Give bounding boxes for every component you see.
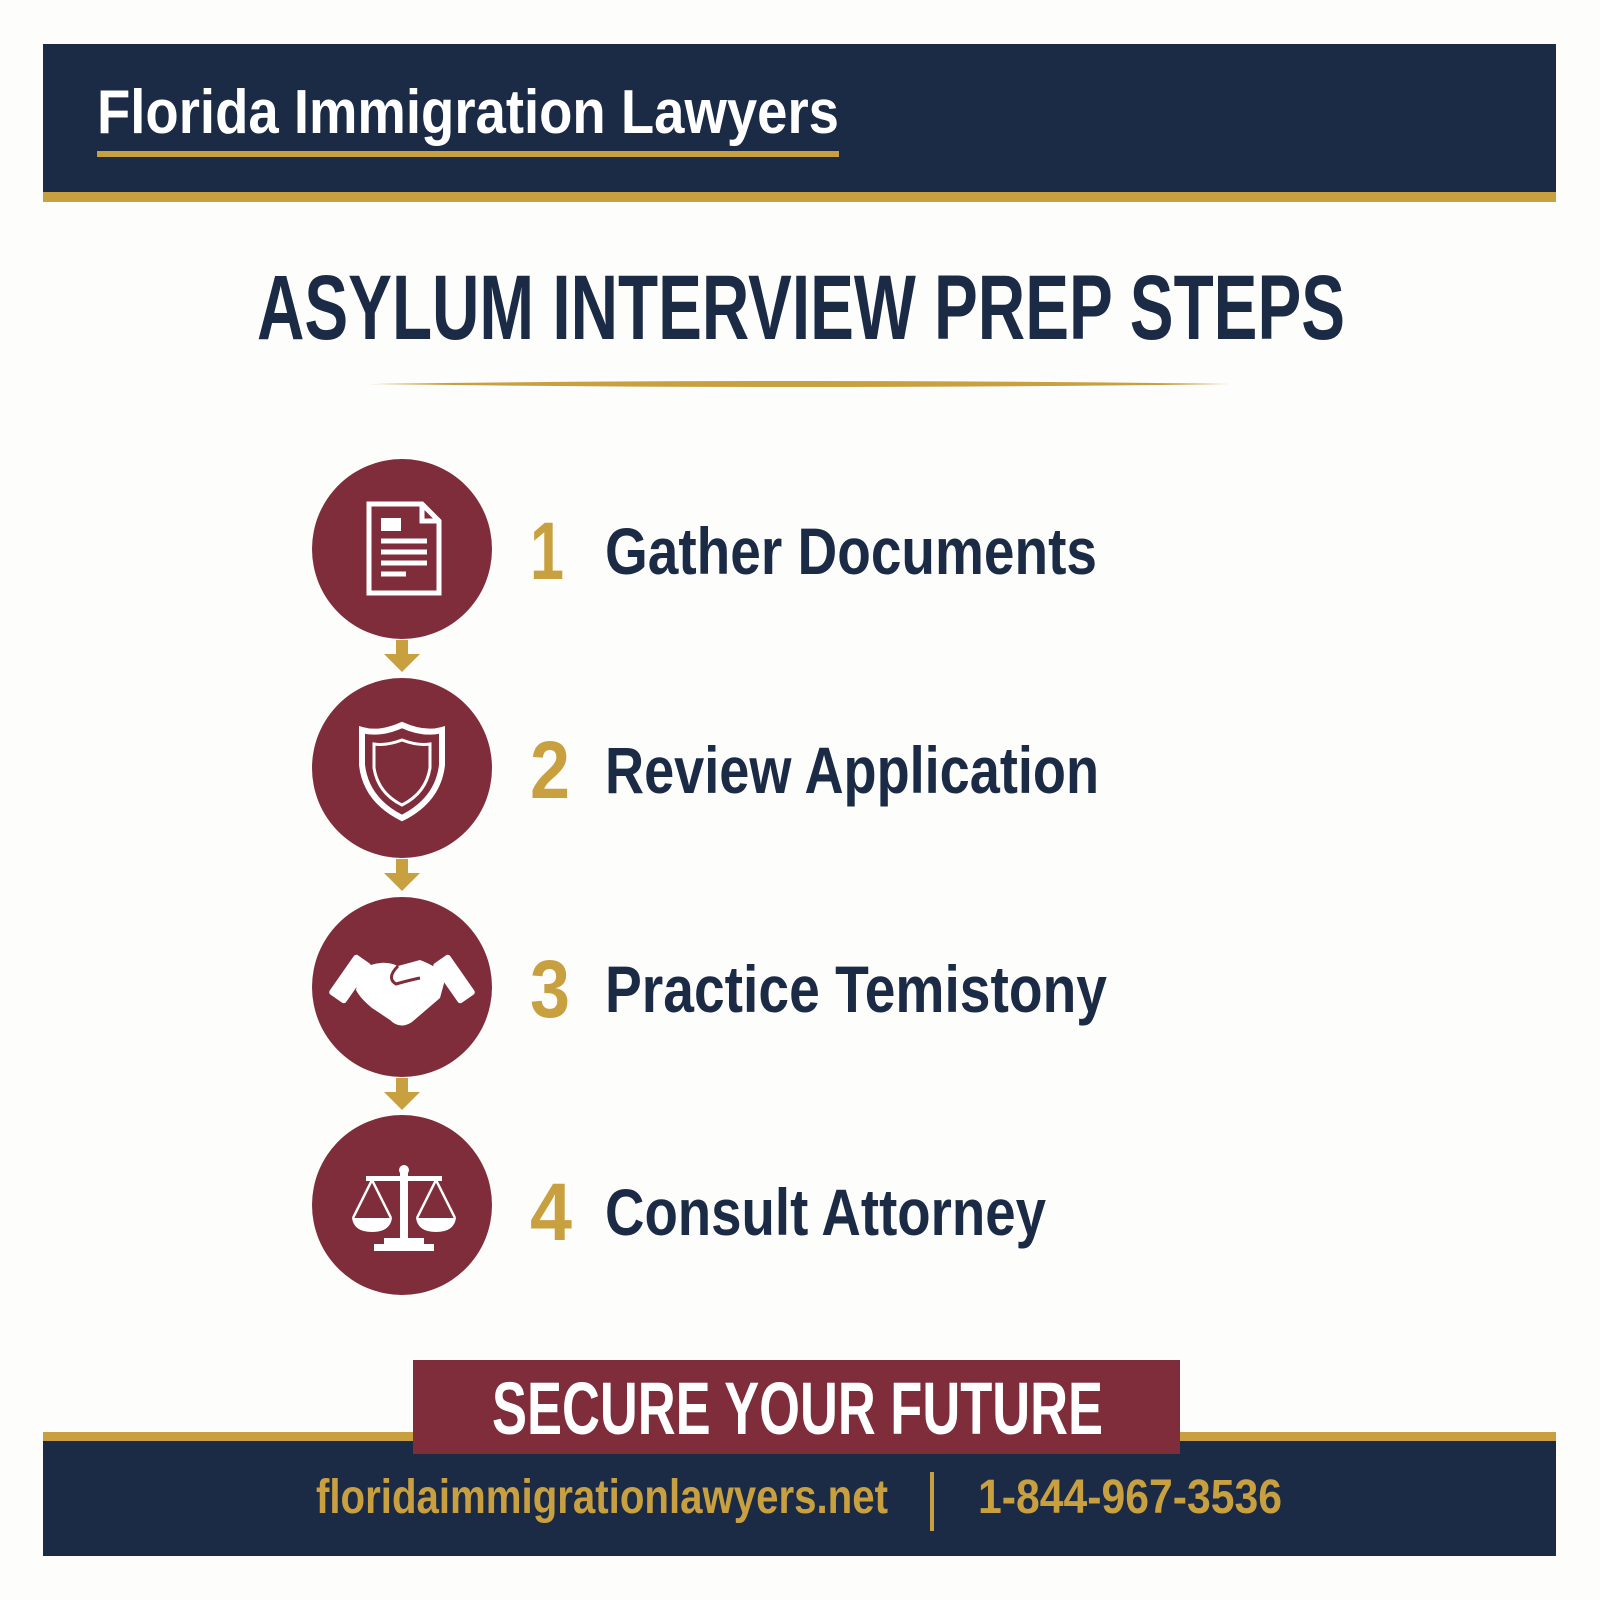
- step 1: Gather Documents: [605, 514, 1097, 588]
- title underline: [369, 381, 1229, 387]
- step 4: [312, 1115, 1046, 1295]
- step 2: Review Application: [605, 733, 1099, 807]
- icon: document: [369, 504, 439, 593]
- step 1: [312, 459, 1097, 639]
- step 3: 3: [530, 944, 570, 1035]
- arrow 2: [384, 859, 420, 891]
- banner: secure your future: SECURE YOUR FUTURE: [492, 1367, 1103, 1450]
- icon: handshake: [328, 954, 476, 1026]
- icon: scales: [352, 1165, 456, 1251]
- banner: secure your future: [413, 1360, 1180, 1454]
- arrow 3: [384, 1078, 420, 1110]
- arrow 1: [384, 640, 420, 672]
- step 1: 1: [530, 506, 564, 597]
- footer url: floridaimmigrationlawyers.net: [316, 1471, 888, 1524]
- step 2: 2: [530, 725, 570, 816]
- footer phone: 1-844-967-3536: [978, 1471, 1282, 1524]
- step 2: [312, 678, 1099, 858]
- step 4: Consult Attorney: [605, 1175, 1046, 1249]
- footer bar: [43, 1432, 1556, 1556]
- steps: [312, 459, 1107, 1295]
- step 3: [312, 897, 1107, 1077]
- icon: shield: [362, 725, 442, 818]
- step 3: Practice Temistony: [605, 952, 1107, 1026]
- header bar: [43, 44, 1556, 202]
- header title: Florida Immigration Lawyers: [97, 78, 839, 147]
- step 4: 4: [530, 1167, 572, 1258]
